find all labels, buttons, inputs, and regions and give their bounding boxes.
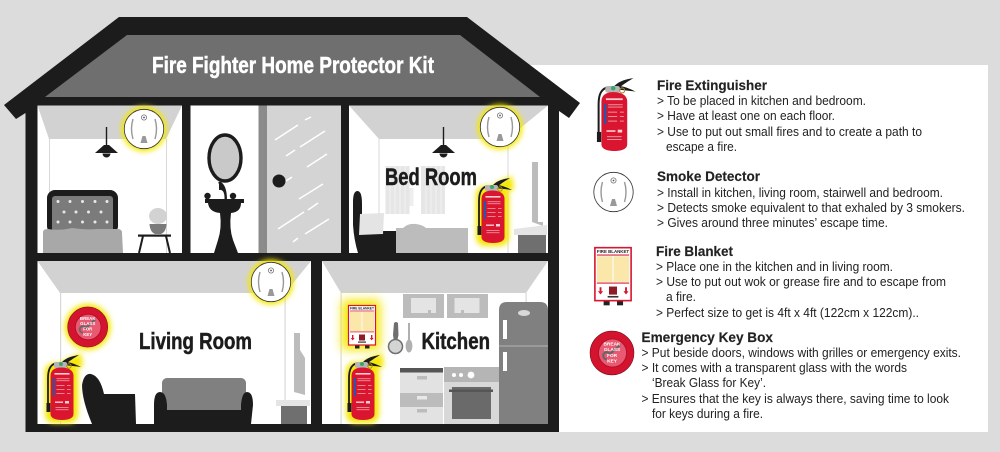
text: blanket notes: > Use to put out wok or grease fire and to escape from — [656, 275, 946, 289]
room: bathroom — [190, 106, 341, 253]
drawers — [400, 368, 443, 424]
text: blanket notes: > Place one in the kitchen and in living room. — [656, 260, 893, 274]
text: extinguisher notes: escape a fire. — [666, 140, 737, 154]
room label: Living Room: Living Room — [139, 328, 252, 354]
TV and cabinet — [514, 162, 547, 253]
sink — [204, 182, 244, 253]
bed — [43, 190, 123, 253]
door — [258, 106, 341, 253]
text: detector notes: > Install in kitchen, living room, stairwell and bedroom. — [657, 186, 943, 200]
icon: ceiling lamp — [432, 127, 455, 158]
refrigerator — [499, 302, 548, 424]
text: detector notes — [657, 186, 965, 230]
text: extinguisher notes: > Use to put out small fires and to create a path to — [657, 125, 922, 139]
icon: fire blanket kitchen — [342, 300, 380, 350]
panel: legend background — [530, 65, 988, 432]
armchair — [82, 374, 136, 424]
armchair — [353, 191, 396, 253]
frying pan — [388, 322, 402, 354]
icon: smoke detector — [594, 172, 633, 212]
icon: ceiling lamp — [95, 127, 118, 158]
roof gable panel — [45, 35, 540, 97]
icon: emergency key box living room — [65, 304, 111, 350]
text: key box notes: ‘Break Glass for Key’. — [652, 376, 766, 390]
text: detector notes: > Gives around three minutes’ escape time. — [657, 216, 888, 230]
text: key box notes: > It comes with a transparent glass with the words — [642, 361, 907, 375]
heading: Emergency Key Box: Emergency Key Box — [642, 330, 773, 345]
text: key box notes: for keys during a fire. — [652, 407, 763, 421]
curtains — [386, 166, 445, 214]
spoon — [406, 323, 412, 352]
side table with plant — [138, 208, 171, 253]
icon: fire extinguisher kitchen — [346, 353, 384, 423]
text: key box notes: > Ensures that the key is always there, saving time to look — [642, 392, 950, 406]
heading: Smoke Detector: Smoke Detector — [657, 169, 761, 184]
grey sofa — [396, 224, 468, 253]
text: key box notes: > Put beside doors, windows with grilles or emergency exits. — [642, 346, 961, 360]
icon: smoke detector living room — [248, 260, 294, 304]
mirror — [209, 135, 241, 181]
icon: fire extinguisher — [597, 78, 636, 151]
room: upstairs bedroom — [38, 106, 182, 253]
sofa — [154, 378, 253, 424]
text: extinguisher notes: > To be placed in kitchen and bedroom. — [657, 94, 866, 108]
icon: fire extinguisher bed room — [476, 176, 514, 246]
heading: Fire Blanket: Fire Blanket — [656, 244, 733, 259]
icon: smoke detector bed room — [478, 104, 522, 150]
text: blanket notes: > Perfect size to get is 4ft x 4ft (122cm x 122cm).. — [656, 306, 919, 320]
room label: Bed Room: Bed Room — [385, 164, 477, 191]
icon: smoke detector bedroom — [122, 106, 166, 152]
house illustration — [4, 17, 580, 432]
legend: fire extinguisher — [597, 78, 922, 154]
icon: fire extinguisher living room — [45, 353, 83, 423]
text: key box notes — [642, 346, 961, 421]
upper cabinets — [403, 294, 488, 318]
room: living room — [38, 261, 311, 424]
text: blanket notes: a fire. — [666, 290, 696, 304]
legend: smoke detector — [594, 169, 965, 230]
legend: emergency key box — [590, 330, 961, 421]
heading: Fire Extinguisher: Fire Extinguisher — [657, 78, 768, 93]
icon: emergency key box — [590, 331, 634, 375]
room label: Kitchen: Kitchen — [422, 328, 490, 354]
text: extinguisher notes: > Have at least one on each floor. — [657, 109, 835, 123]
TV and cabinet — [276, 333, 310, 424]
title: Fire Fighter Home Protector Kit — [152, 52, 434, 78]
text: detector notes: > Detects smoke equivalent to that exhaled by 3 smokers. — [657, 201, 965, 215]
house frame and roof — [4, 17, 580, 432]
icon: fire blanket — [595, 248, 631, 305]
room: kitchen — [322, 261, 548, 424]
legend: fire blanket — [595, 244, 946, 320]
room: bed room — [349, 106, 548, 253]
text: blanket notes — [656, 260, 946, 320]
stove — [444, 367, 499, 424]
text: extinguisher notes — [657, 94, 922, 154]
